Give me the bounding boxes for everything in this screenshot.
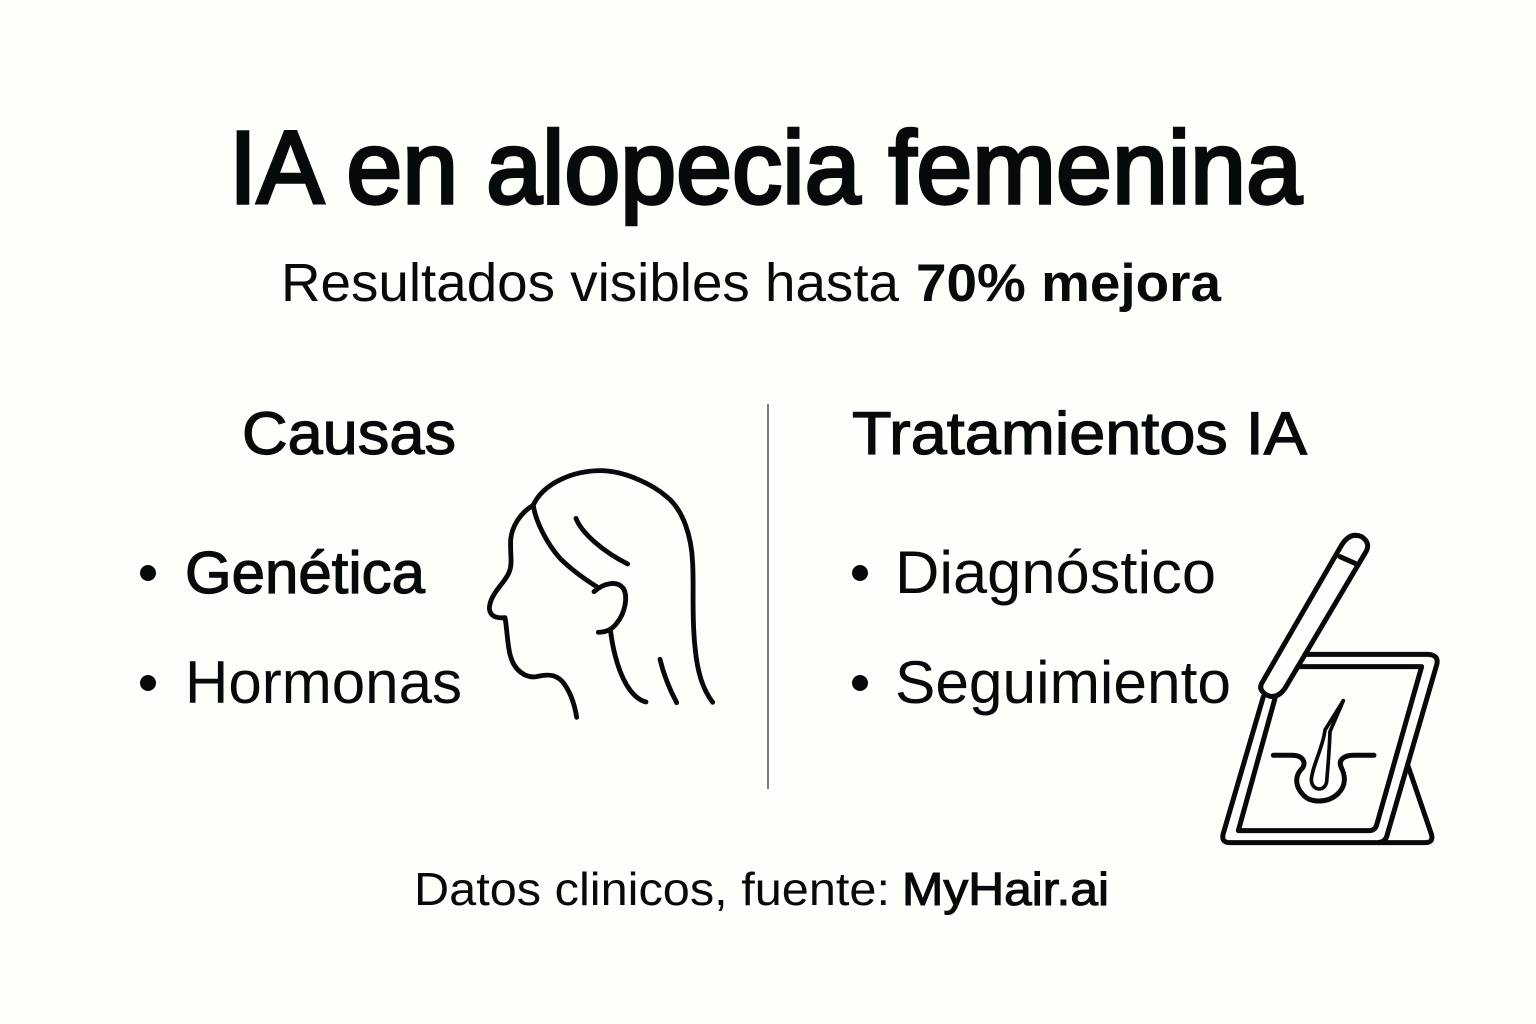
divider [767, 404, 769, 789]
heading: tratamientos IA: Tratamientos IA [852, 400, 1307, 467]
subtitle: Resultados visibles hasta [281, 253, 900, 313]
icon: head profile with hair [489, 471, 713, 717]
list item: genética: Genética [185, 540, 425, 606]
list item: diagnóstico: Diagnóstico [895, 539, 1216, 606]
icon: tablet with stylus and hair follicle [1223, 535, 1437, 843]
footer source: Datos clinicos, fuente: [414, 863, 890, 915]
list item: hormonas: Hormonas [185, 649, 462, 716]
footer source [414, 863, 1109, 915]
panel: causas [140, 400, 713, 717]
subtitle [281, 253, 1222, 313]
subtitle: 70% mejora [916, 254, 1222, 313]
heading: causas: Causas [242, 400, 456, 467]
list item: seguimiento: Seguimiento [895, 649, 1231, 716]
footer source: MyHair.ai [902, 863, 1109, 915]
title: IA en alopecia femenina [229, 110, 1303, 225]
panel: tratamientos IA [852, 400, 1437, 843]
